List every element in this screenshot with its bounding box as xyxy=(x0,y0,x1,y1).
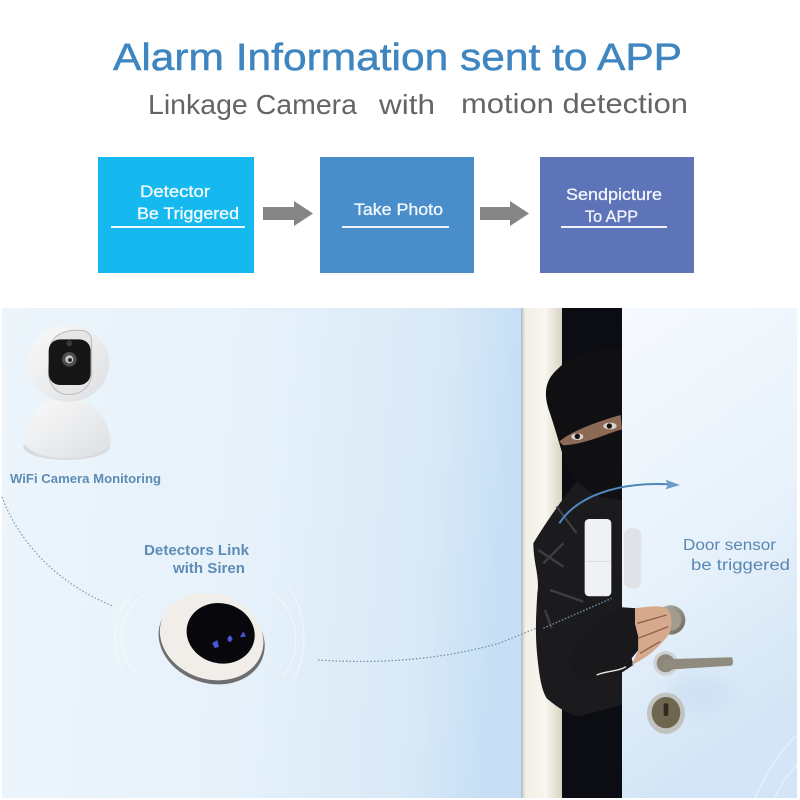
face opening xyxy=(559,415,622,445)
arrow: step one to two xyxy=(263,201,313,226)
balaclava xyxy=(546,349,622,500)
arrow: step two to three xyxy=(480,201,529,226)
dotted link: camera to siren xyxy=(2,497,113,606)
dotted overlay xyxy=(543,598,612,628)
door leaf xyxy=(622,308,797,798)
subtitle: with xyxy=(378,89,435,120)
step box: send picture: To APP xyxy=(585,208,638,226)
label: door sensor triggered xyxy=(683,537,790,574)
subtitle xyxy=(148,88,688,120)
step box: send picture xyxy=(540,157,694,273)
label: door sensor triggered: be triggered xyxy=(691,557,790,574)
label: detectors link with siren: Detectors Link xyxy=(144,542,250,559)
dark door gap xyxy=(562,308,623,798)
door frame xyxy=(521,308,562,798)
panel: scene xyxy=(2,308,797,798)
label: detectors link with siren: with Siren xyxy=(172,560,245,577)
step box: detector triggered: Detector xyxy=(140,183,211,201)
step box: detector triggered: Be Triggered xyxy=(137,205,239,223)
step box: take photo xyxy=(320,157,474,273)
step box: take photo: Take Photo xyxy=(354,201,443,219)
label: wifi camera monitoring: WiFi Camera Monitoring xyxy=(10,471,161,486)
icon: wifi camera xyxy=(23,325,111,460)
door hardware xyxy=(632,605,733,734)
subtitle: motion detection xyxy=(461,88,688,119)
glove and sleeve xyxy=(568,607,638,683)
subtitle: Linkage Camera xyxy=(148,89,357,120)
icon: door sensor xyxy=(585,519,641,596)
step box: send picture: Sendpicture xyxy=(566,186,662,204)
step box: detector triggered xyxy=(98,157,254,273)
label: door sensor triggered: Door sensor xyxy=(683,537,776,554)
title: Alarm Information sent to APP xyxy=(113,37,682,79)
arrow: door opening xyxy=(559,480,680,523)
jacket xyxy=(533,482,622,716)
figure: masked intruder xyxy=(533,349,638,716)
dotted link: siren to door sensor xyxy=(318,597,613,661)
icon: siren hub xyxy=(115,580,304,698)
wall background xyxy=(2,308,522,798)
label: detectors link with siren xyxy=(144,542,250,577)
